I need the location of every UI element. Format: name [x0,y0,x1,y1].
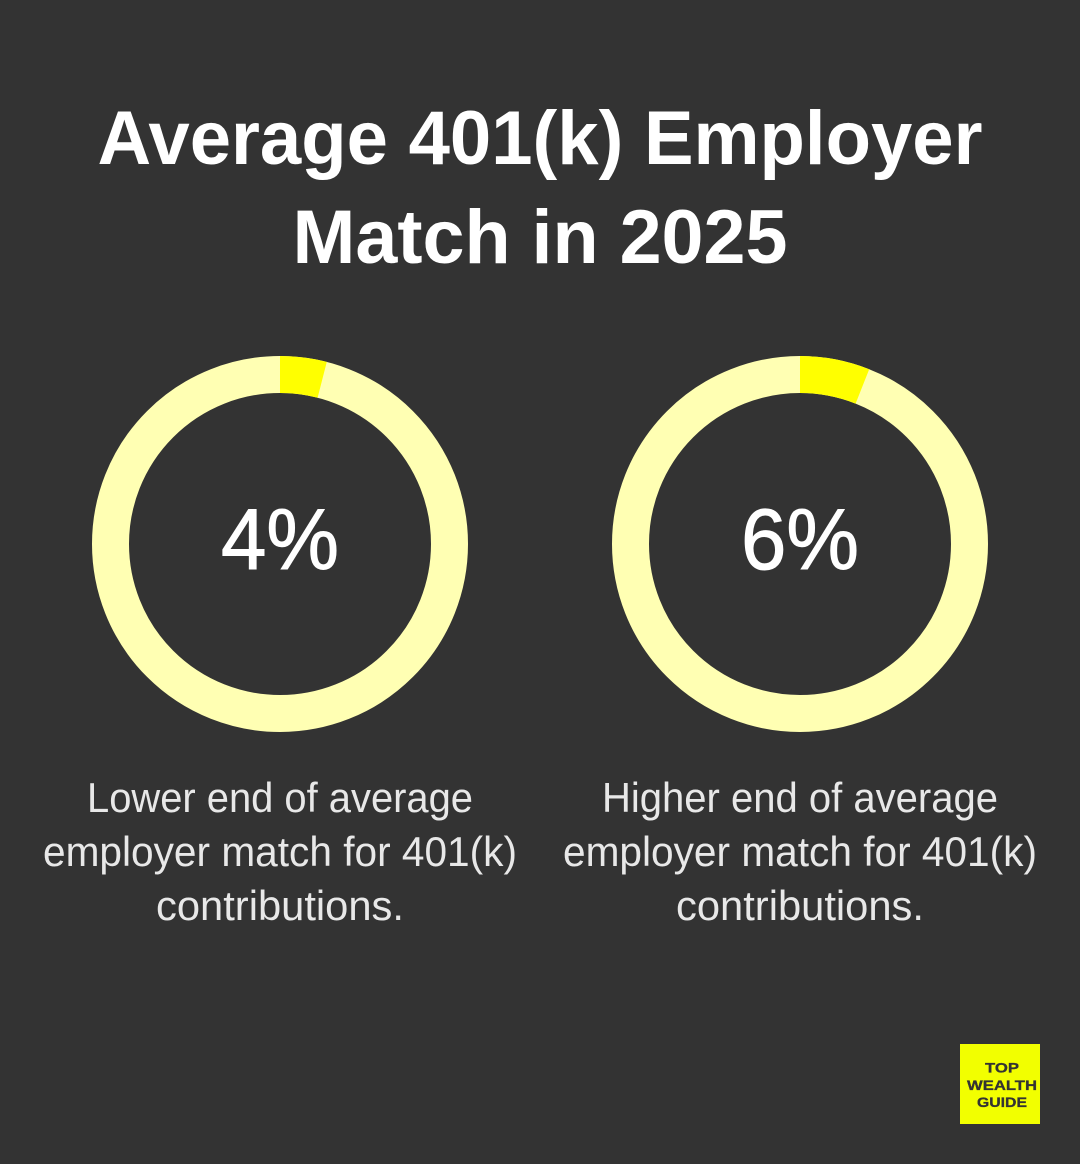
panel: 6% higher end [563,356,1037,929]
description: higher end: contributions. [676,882,924,929]
description: higher end [563,774,1037,929]
donut chart: 6% [630,356,970,714]
value: 6%: 6% [741,492,859,588]
description: lower end: Lower end of average [87,774,473,821]
value: 4%: 4% [221,492,339,588]
description: higher end: Higher end of average [602,774,998,821]
title: Average 401(k) Employer [98,96,982,181]
logo: Top Wealth Guide [960,1044,1040,1124]
donut chart: 4% [110,356,450,714]
logo: Top Wealth Guide: GUIDE [977,1095,1027,1110]
description: lower end: contributions. [156,882,404,929]
description: higher end: employer match for 401(k) [563,828,1037,875]
logo: Top Wealth Guide: TOP [985,1060,1019,1076]
panel: 4% lower end [43,356,517,929]
title [98,96,982,280]
description: lower end [43,774,517,929]
description: lower end: employer match for 401(k) [43,828,517,875]
logo: Top Wealth Guide: WEALTH [967,1078,1037,1093]
title: Match in 2025 [292,195,788,280]
